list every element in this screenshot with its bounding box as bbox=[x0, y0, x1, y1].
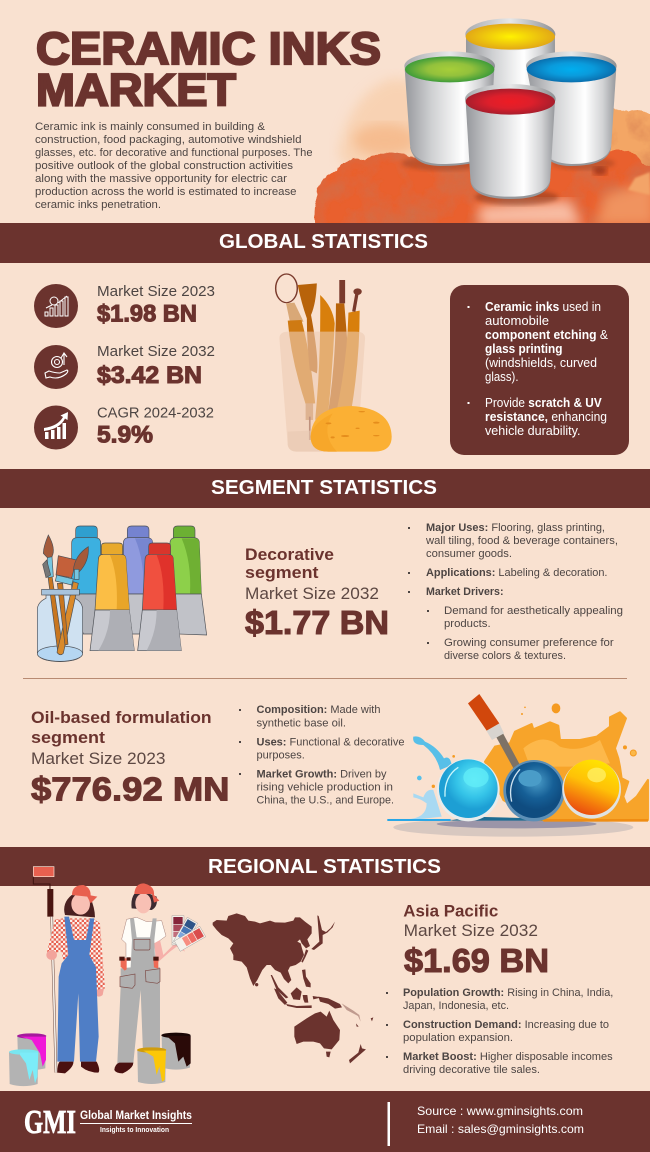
stat: CAGR: 5.9% bbox=[97, 422, 153, 449]
banner: regional statistics: REGIONAL STATISTICS bbox=[208, 856, 441, 878]
banner: segment statistics bbox=[0, 469, 650, 508]
text: decorative segment: segment bbox=[245, 564, 319, 582]
logo: Global Market Insights bbox=[24, 1104, 192, 1141]
text: Asia Pacific: Asia Pacific bbox=[403, 902, 498, 920]
text: decorative segment: Market Size 2032 bbox=[245, 585, 379, 603]
stat: market size 2032: Market Size 2032 bbox=[97, 343, 215, 360]
text: decorative segment bbox=[245, 546, 389, 641]
icon: sculpting tools in glass jar with sponge bbox=[276, 274, 392, 452]
callout: automobile use panel: vehicle durability. bbox=[485, 424, 580, 438]
icon: growth chart with coin bbox=[34, 284, 78, 328]
list: decorative segment details: wall tiling, food & beverage containers, bbox=[425, 535, 618, 547]
icon: paint roller bbox=[33, 867, 56, 1073]
banner: segment statistics: SEGMENT STATISTICS bbox=[211, 477, 437, 499]
intro paragraph: positive outlook of the global construction activities bbox=[35, 160, 294, 172]
list: oil-based segment details: Uses: Functional & decorative bbox=[256, 736, 404, 748]
list: Asia Pacific details: Japan, Indonesia, etc. bbox=[403, 1000, 509, 1012]
map: Asia Pacific bbox=[213, 913, 373, 1063]
callout: automobile use panel: (windshields, curved bbox=[485, 356, 597, 370]
callout: automobile use panel: glass printing bbox=[485, 342, 562, 356]
stat: CAGR: CAGR 2024-2032 bbox=[97, 404, 214, 422]
stat: market size 2023: $1.98 BN bbox=[97, 300, 197, 328]
text: Asia Pacific: $1.69 BN bbox=[404, 942, 549, 979]
banner: global statistics: GLOBAL STATISTICS bbox=[219, 231, 428, 253]
list: decorative segment details: Market Drivers: bbox=[426, 586, 504, 598]
footer bbox=[0, 1091, 650, 1152]
list: oil-based segment details: synthetic base oil. bbox=[256, 718, 346, 730]
text: oil-based formulation segment bbox=[31, 709, 229, 808]
icon: four paint cans bbox=[402, 18, 617, 205]
stat: market size 2023: Market Size 2023 bbox=[97, 283, 215, 300]
list: Asia Pacific details bbox=[386, 987, 613, 1076]
contact details bbox=[417, 1104, 584, 1136]
text: decorative segment: Decorative bbox=[245, 546, 334, 564]
list: Asia Pacific details: Market Boost: Higher disposable incomes bbox=[403, 1051, 613, 1063]
text: oil-based formulation segment: segment bbox=[31, 729, 106, 747]
list: decorative segment details: diverse colors & textures. bbox=[444, 650, 566, 662]
text: Asia Pacific: Market Size 2032 bbox=[404, 922, 538, 940]
list: decorative segment details: products. bbox=[444, 618, 491, 630]
buckets bbox=[9, 1033, 191, 1086]
list: Asia Pacific details: Population Growth: Rising in China, India, bbox=[403, 987, 613, 999]
callout: automobile use panel: Provide scratch & UV bbox=[485, 396, 602, 410]
list: Asia Pacific details: population expansion. bbox=[403, 1032, 513, 1044]
icon: paint tubes and brushes in jar bbox=[37, 526, 207, 662]
title: CERAMIC INKS bbox=[36, 23, 381, 74]
callout: automobile use panel: Ceramic inks used in bbox=[485, 300, 601, 314]
icon: painters with roller, swatches and buckets bbox=[9, 867, 206, 1086]
intro paragraph: Ceramic ink is mainly consumed in building & bbox=[35, 121, 266, 133]
intro paragraph: along with the massive opportunity for electric car bbox=[35, 173, 287, 185]
contact details: Source : www.gminsights.com bbox=[417, 1104, 583, 1118]
intro paragraph bbox=[35, 121, 312, 211]
list: oil-based segment details: Composition: Made with bbox=[256, 704, 380, 716]
list: Asia Pacific details: Construction Demand: Increasing due to bbox=[403, 1019, 609, 1031]
icon: paint balls, brush and splashes bbox=[387, 694, 648, 837]
list: decorative segment details: Demand for aesthetically appealing bbox=[444, 605, 623, 617]
callout: automobile use panel: glass). bbox=[485, 370, 518, 384]
icon: hand holding coin bbox=[34, 345, 78, 389]
list: decorative segment details bbox=[408, 522, 623, 662]
title: MARKET bbox=[36, 64, 236, 116]
callout: automobile use panel bbox=[450, 285, 629, 455]
stat: market size 2032 bbox=[34, 343, 215, 389]
stat: CAGR bbox=[34, 404, 214, 450]
intro paragraph: construction, food packaging, automotive windshield bbox=[35, 134, 302, 146]
painter 1 bbox=[46, 885, 105, 1073]
title bbox=[36, 23, 381, 116]
list: oil-based segment details: China, the U.S., and Europe. bbox=[256, 794, 394, 806]
logo: Global Market Insights: Insights to Innovation bbox=[100, 1127, 169, 1134]
intro paragraph: production across the world is estimated to increase bbox=[35, 186, 296, 198]
text: oil-based formulation segment: $776.92 MN bbox=[31, 770, 229, 808]
logo: Global Market Insights: GMI bbox=[24, 1104, 76, 1141]
logo: Global Market Insights: Global Market Insights bbox=[80, 1108, 192, 1122]
intro paragraph: glasses, etc. for decorative and functional purposes. The bbox=[35, 147, 312, 159]
text: Asia Pacific bbox=[403, 902, 549, 979]
text: oil-based formulation segment: Oil-based formulation bbox=[31, 709, 212, 727]
list: Asia Pacific details: driving decorative tile sales. bbox=[403, 1064, 540, 1076]
text: decorative segment: $1.77 BN bbox=[245, 604, 389, 641]
list: oil-based segment details bbox=[239, 704, 404, 806]
icon: rising arrow with bars bbox=[34, 406, 78, 450]
list: oil-based segment details: rising vehicle production in bbox=[256, 782, 393, 794]
list: decorative segment details: Applications: Labeling & decoration. bbox=[426, 567, 608, 579]
banner: regional statistics bbox=[0, 847, 650, 886]
list: decorative segment details: Growing consumer preference for bbox=[444, 637, 614, 649]
callout: automobile use panel: automobile bbox=[485, 314, 549, 328]
contact details: Email : sales@gminsights.com bbox=[417, 1122, 584, 1136]
intro paragraph: ceramic inks penetration. bbox=[35, 199, 161, 211]
watercolor splash behind paint cans bbox=[315, 78, 650, 230]
stat: market size 2023 bbox=[34, 283, 215, 328]
banner: global statistics bbox=[0, 223, 650, 263]
list: decorative segment details: consumer goods. bbox=[426, 548, 512, 560]
painter 2 bbox=[114, 883, 206, 1073]
text: oil-based formulation segment: Market Size 2023 bbox=[31, 750, 166, 768]
callout: automobile use panel: component etching & bbox=[485, 328, 609, 342]
list: oil-based segment details: purposes. bbox=[256, 750, 305, 762]
list: oil-based segment details: Market Growth: Driven by bbox=[256, 768, 387, 780]
stat: market size 2032: $3.42 BN bbox=[97, 362, 202, 389]
list: decorative segment details: Major Uses: Flooring, glass printing, bbox=[426, 522, 605, 534]
callout: automobile use panel: resistance, enhancing bbox=[485, 410, 607, 424]
